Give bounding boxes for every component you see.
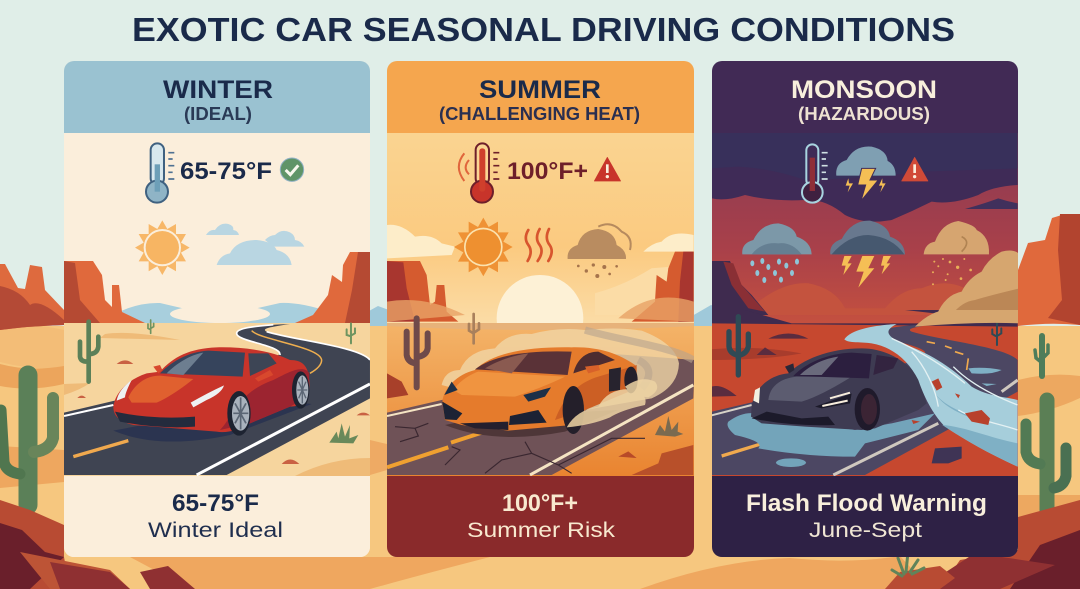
icon: thermometer cool (146, 143, 174, 203)
cactus: right small (1035, 336, 1048, 376)
icon: rain cloud (742, 223, 812, 283)
summer scenery (387, 224, 694, 323)
monsoon dust wall (938, 250, 1018, 312)
winter footer temperature: 65-75°F (172, 490, 259, 517)
summer footer label: Summer Risk (467, 519, 616, 542)
summer dust behind car (442, 328, 693, 410)
summer car (442, 347, 638, 437)
panel: summer (387, 61, 695, 557)
monsoon subheading: (HAZARDOUS) (798, 104, 930, 124)
monsoon flood water (844, 324, 1018, 467)
monsoon footer warning: Flash Flood Warning (746, 490, 987, 517)
winter car (113, 347, 312, 442)
icon: thermometer monsoon (802, 144, 828, 203)
monsoon footer dates: June-Sept (809, 519, 922, 542)
winter road (64, 324, 370, 475)
cactus: right large (1026, 400, 1066, 510)
icon: dust storm cloud (924, 221, 989, 285)
monsoon weather icons (742, 144, 989, 288)
winter scenery: hills and sand (64, 252, 370, 476)
summer temperature: 100°F+ (507, 158, 588, 185)
summer temperature row (454, 143, 631, 278)
icon: winter clouds (206, 224, 304, 265)
icon: thermometer hot (459, 143, 499, 203)
monsoon heading: MONSOON (791, 76, 937, 104)
summer footer temperature: 100°F+ (502, 490, 578, 517)
winter footer label: Winter Ideal (148, 519, 283, 542)
summer dust at wheels (567, 379, 657, 427)
monsoon car (727, 348, 935, 467)
monsoon header band (712, 61, 1018, 133)
icon: warning triangle monsoon (902, 157, 928, 181)
right mesa (1018, 214, 1080, 326)
winter temperature: 65-75°F (180, 158, 272, 185)
icon: heat waves (526, 229, 552, 261)
panel: monsoon (712, 61, 1025, 557)
summer road (387, 314, 695, 475)
summer footer (387, 476, 694, 557)
title: EXOTIC CAR SEASONAL DRIVING CONDITIONS (132, 11, 955, 48)
winter footer (64, 548, 370, 557)
icon: warning triangle (594, 157, 621, 181)
icon: dust cloud (568, 224, 631, 278)
summer ground (387, 323, 694, 476)
cactus: left large (1, 375, 53, 505)
rocks: bottom left (0, 500, 195, 589)
winter temperature row (135, 143, 304, 275)
monsoon ground (712, 323, 1018, 476)
icon: bottom agave plant (892, 552, 924, 576)
monsoon road (712, 324, 1018, 475)
winter header band (64, 61, 370, 133)
monsoon storm sky (712, 133, 1025, 315)
panel: winter (64, 61, 370, 557)
summer heading: SUMMER (479, 76, 601, 104)
icon: lightning cloud (830, 221, 905, 288)
icon: summer sun (454, 218, 513, 276)
summer header band (387, 61, 694, 133)
winter desert details (77, 320, 370, 464)
left mesa (0, 264, 64, 330)
icon: winter sun (135, 220, 190, 275)
winter heading: WINTER (163, 76, 273, 104)
monsoon footer (712, 476, 1018, 557)
icon: green check (280, 158, 304, 181)
summer subheading: (CHALLENGING HEAT) (439, 104, 640, 124)
icon: storm cloud with bolt (836, 146, 896, 201)
rocks: bottom right (885, 500, 1080, 589)
winter subheading: (IDEAL) (184, 104, 252, 124)
